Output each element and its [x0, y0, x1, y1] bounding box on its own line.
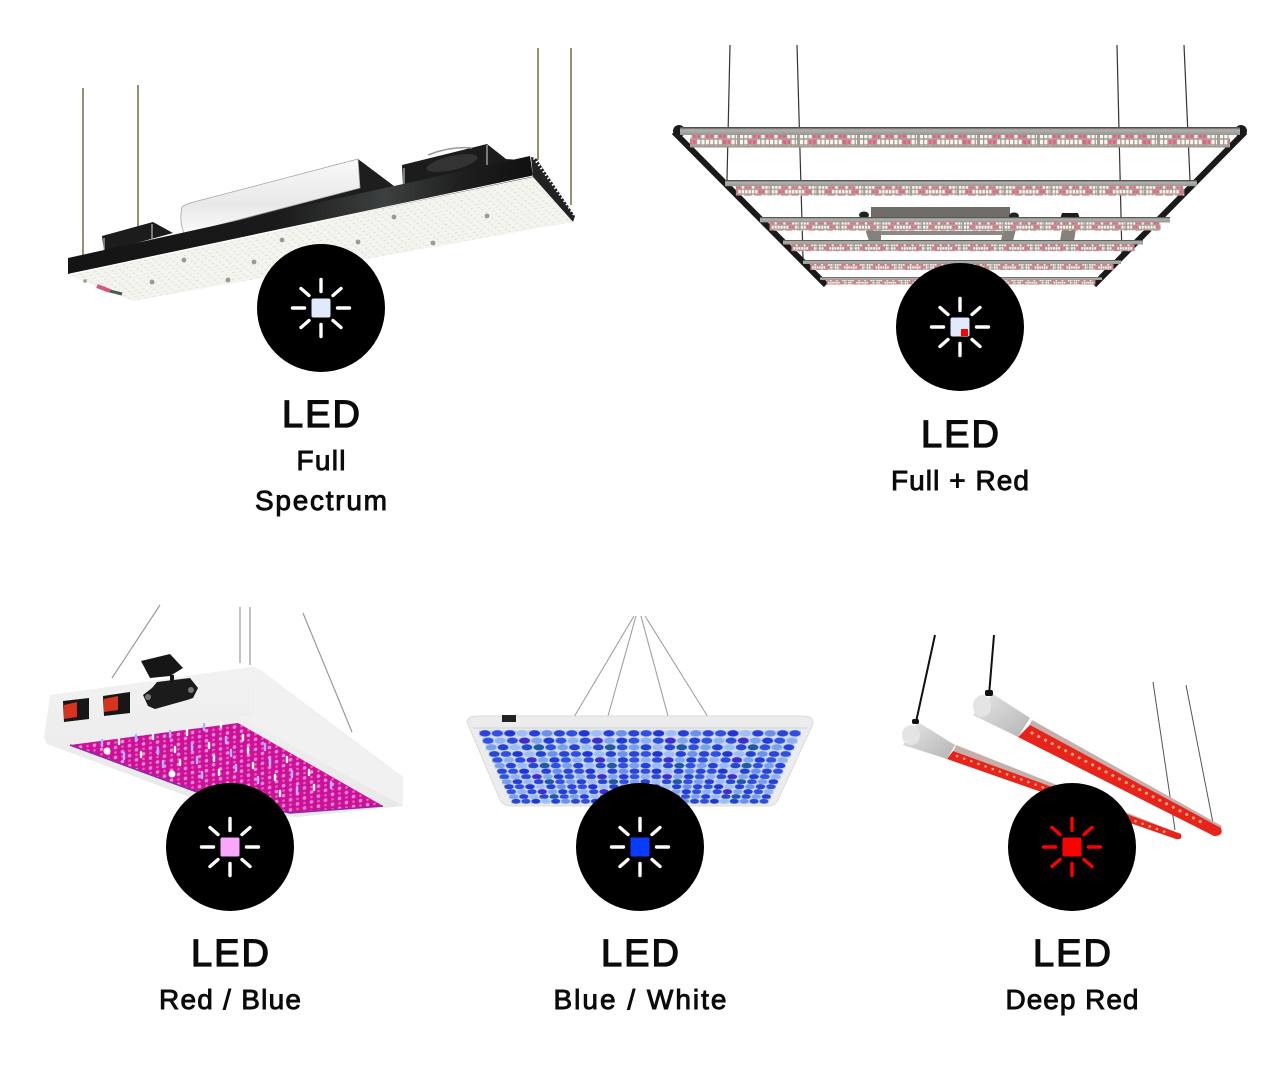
label: LED Full Spectrum: Full	[296, 445, 346, 476]
label: LED Blue / White: Blue / White	[554, 984, 726, 1015]
bar 5	[803, 260, 1121, 270]
label: LED Red / Blue: Red / Blue	[159, 984, 301, 1015]
label: LED Blue / White	[554, 933, 726, 1015]
panel: LED Full Spectrum	[68, 48, 575, 516]
photo: multi-bar LED light frame	[673, 45, 1247, 285]
photo: red and blue LED panel	[44, 605, 403, 817]
icon: red and blue light	[166, 783, 294, 911]
label: LED Blue / White: LED	[601, 933, 679, 975]
icon: blue and white light	[576, 783, 704, 911]
bar 6	[820, 277, 1102, 285]
label: LED Red / Blue	[159, 933, 301, 1015]
label: LED Full Spectrum	[255, 394, 387, 516]
bar 1	[680, 127, 1240, 148]
label: LED Full Spectrum: Spectrum	[255, 485, 387, 516]
panel: LED Blue / White	[467, 616, 813, 1015]
bar 4	[783, 240, 1143, 251]
photo: full spectrum quantum board light	[68, 48, 575, 301]
label: LED Full + Red: LED	[921, 414, 999, 456]
photo: blue and white LED panel	[467, 616, 813, 806]
bar 3	[760, 217, 1170, 231]
panel: LED Red / Blue	[44, 605, 403, 1015]
label: LED Deep Red	[1006, 933, 1138, 1015]
panel: LED Deep Red	[902, 635, 1222, 1015]
icon: full spectrum light	[257, 244, 385, 372]
label: LED Deep Red: LED	[1033, 933, 1111, 975]
label: LED Deep Red: Deep Red	[1006, 984, 1138, 1015]
photo: deep red tube lights	[902, 635, 1222, 839]
label: LED Full + Red: Full + Red	[891, 465, 1029, 496]
label: LED Red / Blue: LED	[191, 933, 269, 975]
panel: LED Full + Red	[673, 45, 1247, 496]
icon: deep red light	[1008, 783, 1136, 911]
bar 2	[725, 180, 1197, 196]
label: LED Full Spectrum: LED	[282, 394, 360, 436]
label: LED Full + Red	[891, 414, 1029, 496]
icon: full plus red light	[896, 263, 1024, 391]
